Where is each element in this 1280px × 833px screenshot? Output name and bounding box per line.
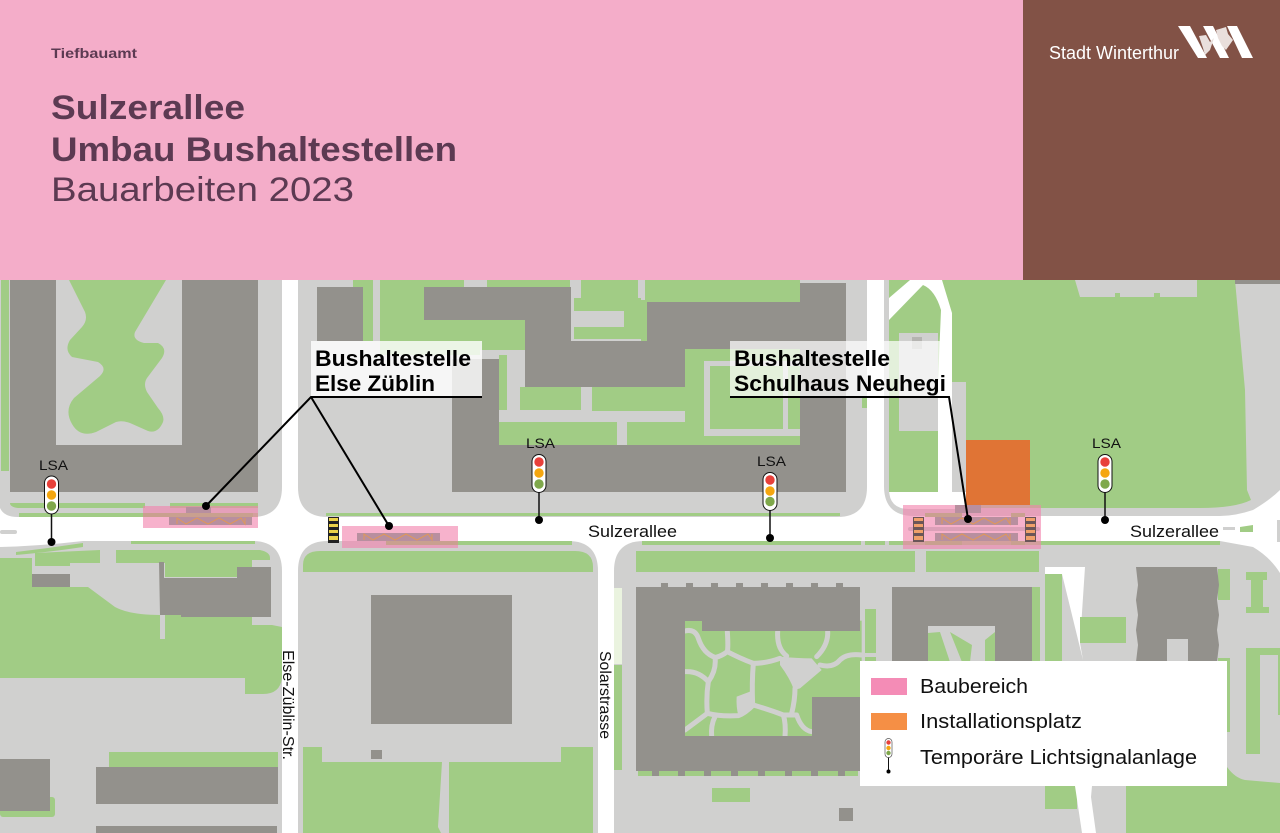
crosswalk east [1025,517,1036,542]
traffic light: centre east [757,453,787,542]
crosswalk yellow [328,517,339,543]
legend icon: traffic light [885,738,892,774]
title: Umbau Bushaltestellen [51,131,457,169]
block: south east [614,541,1280,833]
block: north east [884,280,1280,516]
street label: Sulzerallee east: Sulzerallee [1130,522,1219,541]
department label: Tiefbauamt [51,45,137,61]
logo panel [1023,0,1280,280]
block: north centre [298,280,867,517]
street label: Else-Züblin-Str.: Else-Züblin-Str. [279,650,296,760]
callout: Schulhaus Neuhegi [730,341,972,523]
callout: Schulhaus Neuhegi: Schulhaus Neuhegi [734,371,946,396]
legend label: Installationsplatz: Installationsplatz [920,711,1082,733]
construction zone: Else Züblin north [143,506,258,528]
logo text: Stadt Winterthur [1049,43,1179,63]
traffic light: east: LSA [1092,435,1122,451]
legend label: Temporäre Lichtsignalanlage: Temporäre Lichtsignalanlage [920,747,1197,769]
block: south centre [298,541,598,833]
callout: Else Züblin: Else Züblin [315,371,435,396]
traffic light: east [1092,435,1122,524]
buildings north centre [424,283,846,492]
installation area [966,440,1030,505]
legend [860,661,1227,786]
construction zone: Else Züblin south [342,526,458,548]
traffic light: west: LSA [39,457,69,473]
street label: Sulzerallee centre: Sulzerallee [588,522,677,541]
header band [0,0,1023,280]
courtyard with paths [685,621,862,737]
legend swatch: Installationsplatz [871,713,907,730]
map base [0,280,1280,833]
block: south west [0,541,282,833]
crosswalk west [913,517,924,542]
logo mark [1178,26,1253,58]
legend label: Baubereich: Baubereich [920,676,1028,698]
title: Sulzerallee [51,89,245,127]
callout: Else Züblin [202,341,482,530]
street label: Solarstrasse: Solarstrasse [596,651,613,739]
callout: Else Züblin: Bushaltestelle [315,346,471,371]
traffic light: centre east: LSA [757,453,787,469]
title: Bauarbeiten 2023 [51,171,354,209]
road details [0,520,1280,542]
block: north west [0,280,282,517]
construction zone: Schulhaus Neuhegi [903,505,1041,549]
traffic light: west [39,457,69,546]
title [51,89,457,209]
legend swatch: Baubereich [871,678,907,695]
callout: Schulhaus Neuhegi: Bushaltestelle [734,346,890,371]
traffic light: centre west [526,435,556,524]
traffic light: centre west: LSA [526,435,556,451]
